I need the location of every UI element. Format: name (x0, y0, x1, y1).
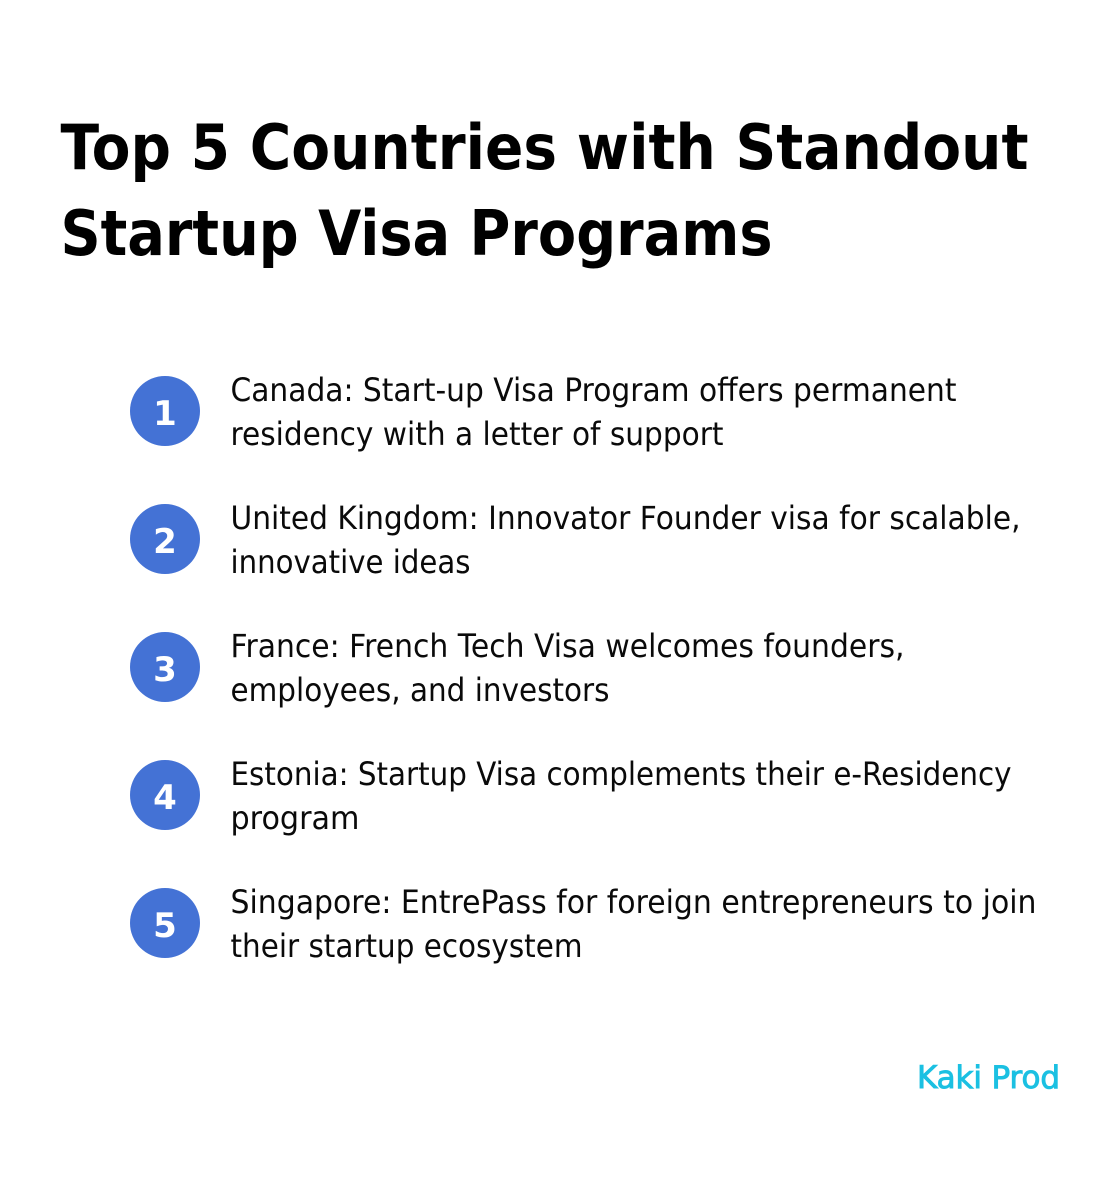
number badge 1: 1 (153, 394, 177, 434)
title: Startup Visa Programs (60, 197, 772, 270)
text: United Kingdom: innovative ideas (230, 543, 470, 581)
text: Canada (230, 371, 956, 453)
text: France (230, 627, 904, 709)
title (60, 111, 1028, 270)
text: United Kingdom: United Kingdom: Innovator Founder visa for scalable, (230, 499, 1020, 537)
text: Estonia (230, 755, 1012, 837)
number badge 2: 2 (153, 522, 177, 562)
list item 5: Singapore (130, 883, 1036, 965)
list item 4: Estonia (130, 755, 1012, 837)
number badge 4: 4 (153, 778, 177, 818)
number badge 5: 5 (153, 906, 177, 946)
text: Estonia: Estonia: Startup Visa complements their e-Residency (230, 755, 1012, 793)
number badge 4 (130, 760, 200, 830)
number badge 5 (130, 888, 200, 958)
number badge 1 (130, 376, 200, 446)
text: Canada: Canada: Start-up Visa Program offers permanent (230, 371, 956, 409)
list item 1: Canada (130, 371, 956, 453)
list item 2: United Kingdom (130, 499, 1020, 581)
title: Top 5 Countries with Standout (60, 111, 1028, 184)
list item 3: France (130, 627, 904, 709)
number badge 2 (130, 504, 200, 574)
text: Singapore (230, 883, 1036, 965)
number badge 3: 3 (153, 650, 177, 690)
logo: Kaki Prod: Kaki Prod (917, 1060, 1060, 1096)
text: United Kingdom (230, 499, 1020, 581)
text: Singapore: Singapore: EntrePass for foreign entrepreneurs to join (230, 883, 1036, 921)
text: Singapore: their startup ecosystem (230, 927, 582, 965)
text: Canada: residency with a letter of support (230, 415, 724, 453)
number badge 3 (130, 632, 200, 702)
text: France: employees, and investors (230, 671, 610, 709)
text: France: France: French Tech Visa welcomes founders, (230, 627, 904, 665)
text: Estonia: program (230, 799, 360, 837)
